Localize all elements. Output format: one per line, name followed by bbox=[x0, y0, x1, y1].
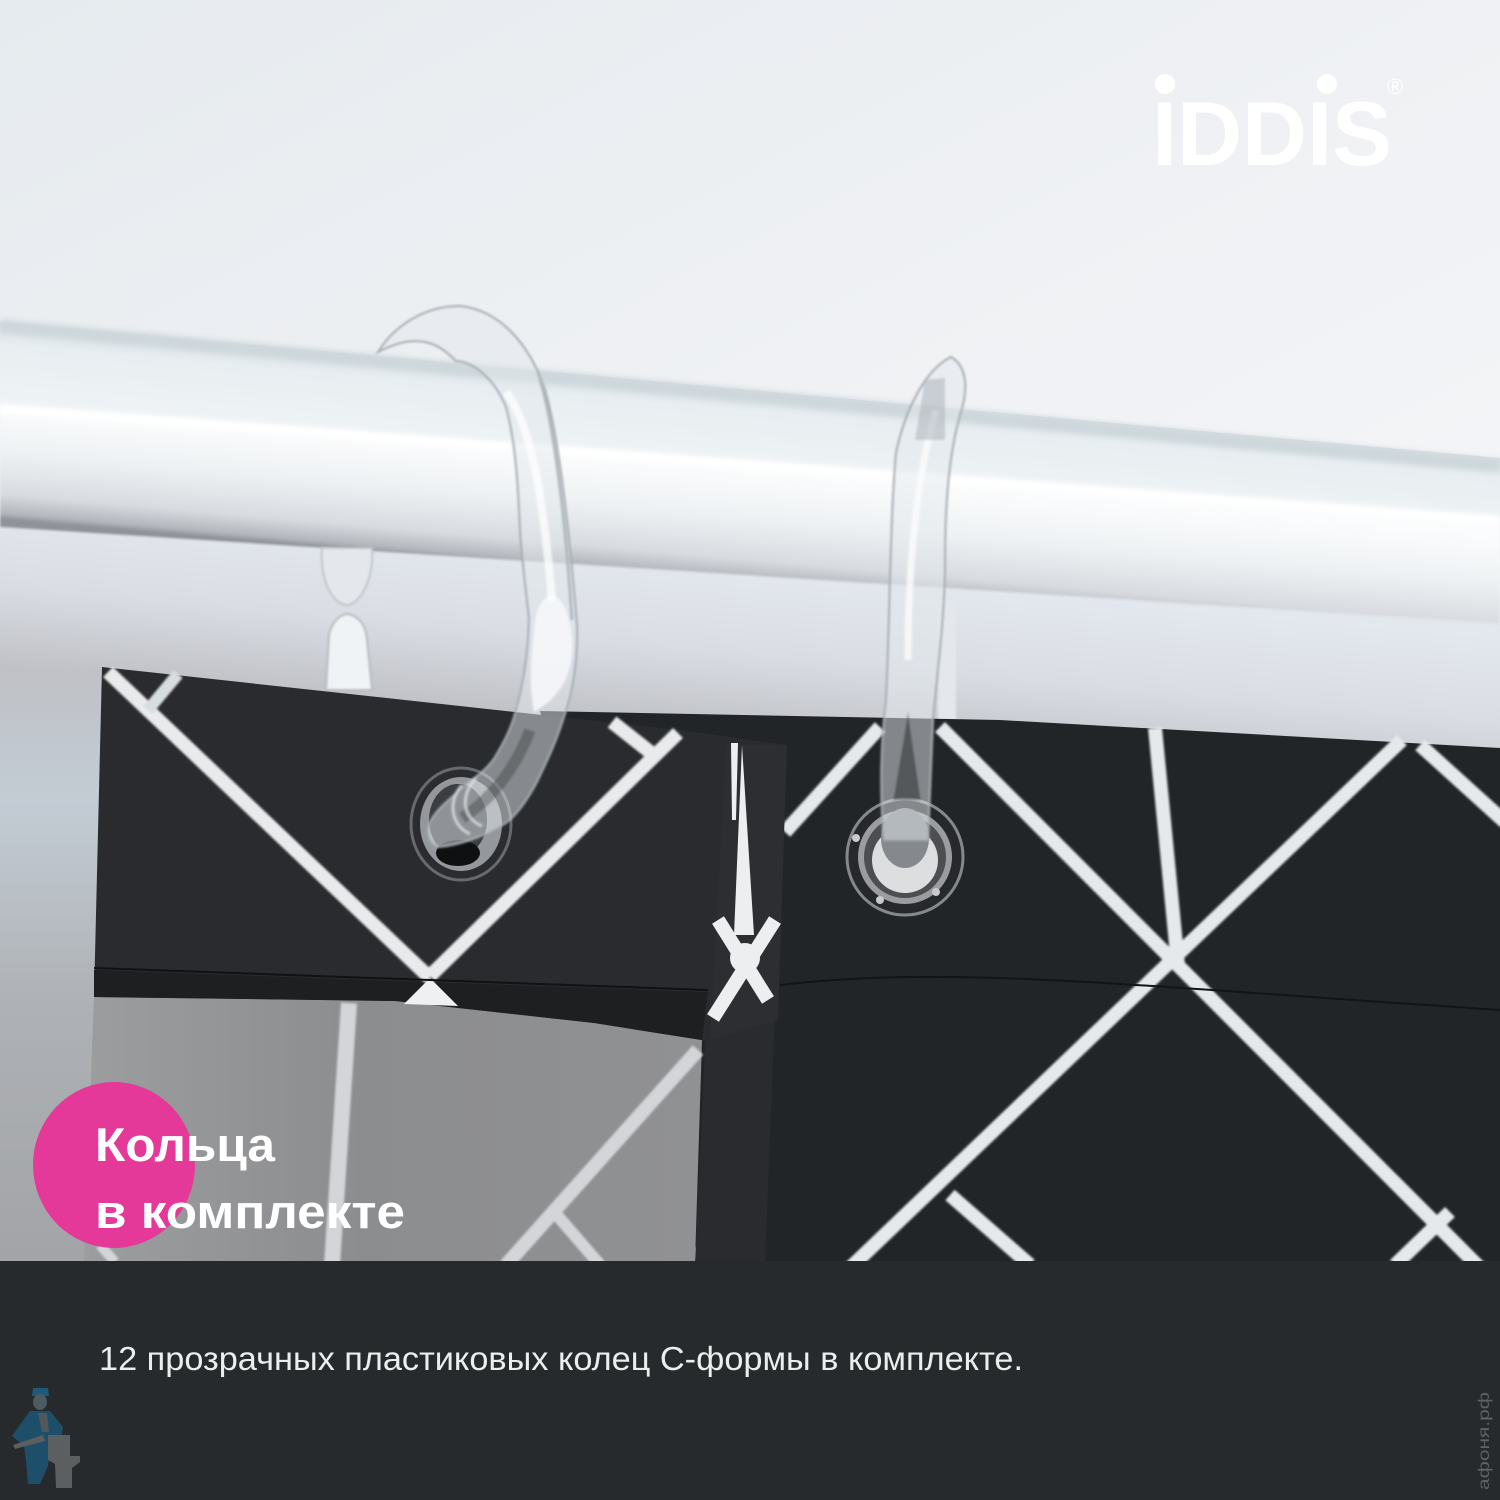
bottom dark text band bbox=[0, 1261, 1500, 1500]
eyelet left bbox=[411, 768, 511, 880]
badge title: в комплекте bbox=[95, 1185, 405, 1238]
folded side strip bbox=[695, 1010, 775, 1262]
side fold white stripe bbox=[710, 745, 787, 1040]
ring tips behind rod bbox=[322, 548, 956, 720]
watermark url: афоня.рф bbox=[1476, 1392, 1493, 1490]
clear C-ring left bbox=[378, 306, 577, 847]
eyelet right bbox=[847, 799, 963, 915]
shower curtain rod bbox=[0, 322, 1500, 624]
folded top hem of curtain bbox=[94, 667, 787, 1040]
out-of-focus lower wall and second rod bbox=[0, 515, 1500, 780]
gray lower curtain section bbox=[84, 997, 702, 1265]
watermark icon: plumber with toilet bbox=[12, 1388, 80, 1488]
left lower wall beside curtain bbox=[0, 670, 110, 1265]
pink badge circle bbox=[33, 1082, 195, 1248]
right curtain panel bbox=[540, 711, 1500, 1268]
wall background bbox=[0, 0, 1500, 760]
description text: 12 прозрачных пластиковых колец С-формы в комплекте. bbox=[99, 1340, 1023, 1377]
logo: IDDIS: ® bbox=[1387, 74, 1403, 99]
badge title bbox=[95, 1118, 405, 1238]
curtain lattice lines right bbox=[785, 727, 1500, 1268]
logo: IDDIS: IDDIS bbox=[1152, 84, 1392, 185]
clear C-ring right bbox=[881, 357, 965, 840]
badge title: Кольца bbox=[95, 1118, 276, 1171]
